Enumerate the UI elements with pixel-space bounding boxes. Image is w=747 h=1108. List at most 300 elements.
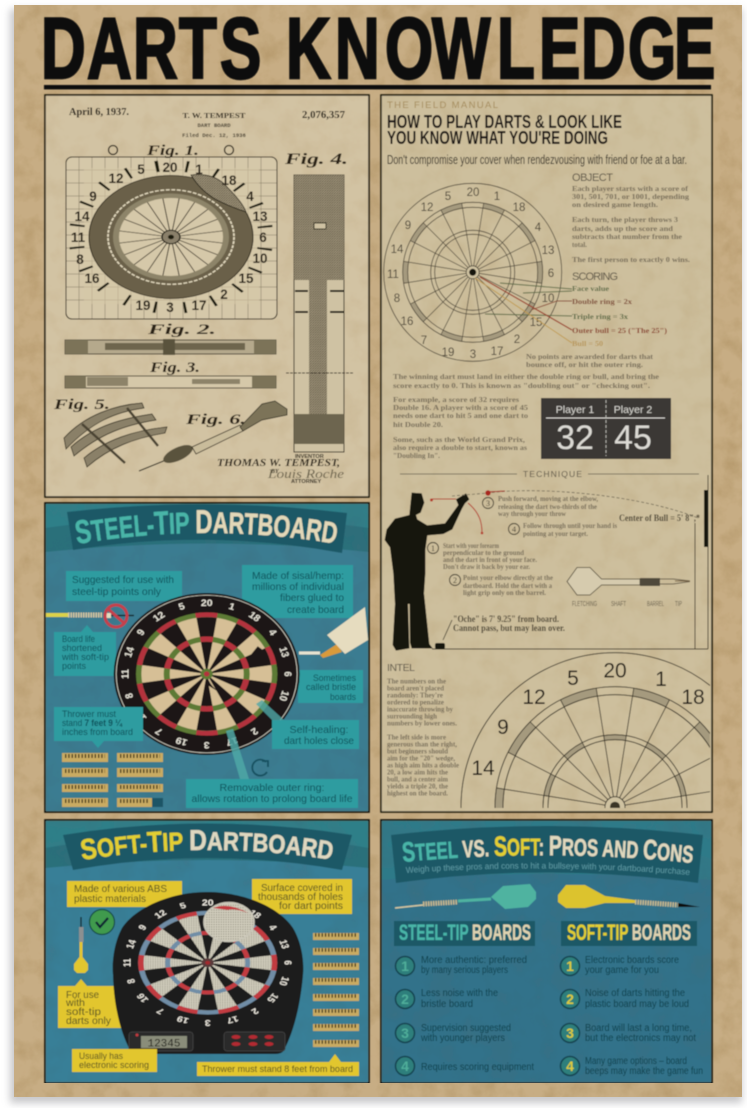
board numbers: 6 [548, 268, 554, 280]
chalkboard scores [541, 398, 671, 459]
patent header: T. W. TEMPEST [182, 112, 246, 120]
patent signature block: ATTORNEY [291, 479, 322, 485]
diagram: outline dartboard [382, 182, 563, 363]
scoring text: Bull = 50 [572, 339, 603, 348]
board numbers: 5 [137, 162, 145, 177]
callout: self-healing [256, 700, 359, 749]
callout: electronic scoring [72, 1049, 157, 1072]
technique steps: dartboard. Hold the dart with a [463, 581, 552, 590]
board numbers: 2 [248, 725, 260, 737]
chalkboard scores: 32 [556, 419, 594, 457]
board numbers: 5 [177, 601, 187, 613]
patent signature block: INVENTOR [295, 454, 324, 460]
object text: The first person to exactly 0 wins. [572, 255, 690, 264]
board numbers [122, 899, 294, 1027]
doubling text: Double 16. A player with a score of 45 [393, 403, 528, 412]
board numbers [120, 599, 293, 749]
icon: rotation arrow [252, 760, 268, 776]
callout: surface holes: thousands of holes [258, 892, 343, 903]
board numbers: 7 [421, 335, 427, 347]
intel text: highest on the board. [387, 788, 448, 798]
figure 1: patent dartboard [62, 143, 280, 319]
patent signature block: BY [270, 469, 280, 475]
callout: sisal: millions of individual [252, 582, 344, 593]
panel: steel vs soft pros and cons [381, 820, 712, 1083]
column: soft-tip boards: Many game options – board [585, 1056, 687, 1067]
board numbers: 7 [153, 725, 165, 736]
board numbers: 13 [542, 245, 554, 257]
board numbers: 11 [120, 669, 132, 679]
enlarged numbers: 1 [655, 668, 667, 691]
board numbers: 16 [133, 708, 150, 722]
figure 3: cross section bar: Fig. 3. [149, 360, 200, 376]
board numbers: 7 [155, 1006, 166, 1016]
intel text: surrounding high [387, 712, 437, 720]
column: soft-tip boards: Electronic boards score [585, 955, 679, 966]
board numbers: 14 [124, 938, 139, 950]
doubling text: also require a double to start, known as [393, 443, 527, 452]
column: steel-tip boards: bristle board [421, 999, 473, 1010]
callout: sisal: create board [287, 605, 344, 616]
board numbers: 10 [276, 689, 291, 703]
figure 6: patent dart [139, 401, 287, 471]
technique steps: way through your throw [498, 509, 567, 518]
oche note [435, 615, 565, 649]
board numbers: 20 [467, 187, 479, 199]
callout: surface holes [252, 879, 352, 914]
board numbers: 11 [387, 269, 399, 281]
board numbers: 4 [246, 189, 254, 204]
callout: soft-tip only [58, 979, 121, 1028]
callout: thrower distance: stand 7 feet 9 ¼ [62, 718, 123, 728]
patent header: April 6, 1937. [69, 107, 130, 118]
callout: ABS plastic [67, 881, 182, 907]
intel text: but beginners should [387, 746, 449, 756]
callout: removable outer ring: Removable outer ring: [220, 783, 324, 794]
column: soft-tip boards: 4 [566, 1058, 574, 1074]
patent header [69, 107, 345, 139]
board numbers [387, 187, 554, 361]
object text: total. [572, 240, 587, 249]
callout: electronic scoring: electronic scoring [79, 1060, 149, 1070]
score display [129, 1032, 193, 1051]
figure 5: wire segments [53, 397, 167, 467]
callout: electronic scoring: Usually has [79, 1051, 123, 1061]
callout: soft-tip only: For use [66, 990, 99, 1001]
board numbers: 9 [135, 627, 148, 638]
doubling text: "Doubling In". [393, 451, 440, 460]
intel text: The left side is more [387, 732, 447, 742]
oche note: "Oche" is 7' 9.25" from board. [453, 615, 559, 625]
callout: board life: points [62, 661, 86, 672]
pros and cons heading banner [391, 826, 703, 883]
patent signature block: Louis Roche [267, 466, 344, 481]
technique steps: releasing the dart two-thirds of the [498, 502, 598, 511]
icon: steel dart [395, 884, 536, 909]
icon: soft dart [558, 885, 700, 908]
enlarged numbers: 5 [567, 667, 579, 690]
technique steps: 3 [486, 499, 490, 508]
technique steps: Point your elbow directly at the [463, 573, 554, 582]
board numbers: 14 [391, 244, 404, 256]
dart diagram: SHAFT [611, 599, 626, 608]
object text: Each player starts with a score of [572, 184, 689, 193]
figure 2: cross section bar [65, 322, 276, 355]
technique steps: 2 [453, 576, 457, 585]
board numbers: 17 [491, 346, 503, 358]
board numbers: 13 [252, 209, 268, 224]
doubling text [393, 372, 660, 460]
doubling text: score exactly to 0. This is known as "doubling out" or "checking out". [393, 381, 650, 390]
icon: soft dart [74, 917, 88, 973]
column: steel-tip boards: Requires scoring equipment [421, 1062, 534, 1073]
panel: field manual [381, 95, 747, 963]
score display: 12345 [147, 1038, 181, 1050]
object text: Each turn, the player throws 3 [572, 215, 678, 224]
callout: removable outer ring [186, 729, 358, 808]
intel text: board aren't placed [387, 684, 445, 692]
callout: board life [54, 625, 116, 676]
panel: soft-tip dartboard [45, 820, 369, 1083]
figure 2: cross section bar: Fig. 2. [146, 322, 216, 338]
magnified mesh [204, 902, 254, 942]
dart diagram [567, 568, 690, 608]
enlarged numbers: 20 [603, 660, 627, 682]
callout: bristle boards: boards [330, 692, 356, 703]
patent header: 2,076,357 [302, 110, 345, 121]
object text: subtracts that number from the [572, 232, 683, 241]
diagram: enlarged dartboard [460, 652, 711, 808]
board numbers: 18 [247, 908, 263, 920]
board numbers: 5 [445, 191, 451, 203]
scoring leader lines [475, 277, 572, 343]
icon: foot rulers [62, 753, 163, 807]
callout: thrower distance: inches from board [62, 727, 133, 737]
intel text: bull, and a center aim [387, 774, 449, 784]
board numbers: 3 [205, 1018, 211, 1027]
technique steps: 4 [512, 525, 516, 534]
scoring text: Triple ring = 3x [572, 312, 628, 321]
enlarged numbers: 18 [681, 686, 705, 709]
column: soft-tip boards: 3 [566, 1025, 574, 1041]
callout: self-healing: dart holes close [284, 736, 354, 747]
column: soft-tip boards: beeps may make the game fun [585, 1066, 703, 1077]
figure 4: vertical section: Fig. 4. [284, 151, 348, 168]
callout: sisal [242, 565, 353, 618]
icon: prohibited soft dart [46, 605, 134, 627]
callout: board life: shortened [62, 643, 102, 654]
callout: ABS plastic: plastic materials [74, 894, 146, 905]
board numbers: 20 [202, 899, 214, 907]
callout: soft-tip only: with [65, 998, 85, 1009]
board numbers: 8 [123, 691, 136, 700]
patent header: Filed Dec. 12, 1936 [182, 132, 247, 139]
board numbers: 18 [221, 173, 237, 188]
patent signature block [217, 454, 344, 485]
column: steel-tip boards: 2 [401, 991, 409, 1007]
board numbers: 13 [276, 646, 291, 659]
object text [572, 172, 690, 264]
technique heading: TECHNIQUE [523, 469, 582, 479]
scoring text: No points are awarded for darts that [526, 352, 654, 361]
board numbers: 20 [162, 160, 178, 175]
callout: board life: with soft-tip [61, 652, 109, 663]
column: steel-tip boards: with younger players [420, 1033, 505, 1044]
board numbers: 4 [535, 222, 542, 234]
intel text: INTEL [387, 662, 415, 674]
patent signature block: THOMAS W. TEMPEST, [217, 458, 340, 469]
doubling text: hit Double 20. [393, 420, 443, 429]
dart diagram: TIP [675, 599, 682, 608]
board numbers: 9 [136, 923, 149, 932]
board numbers: 14 [74, 209, 90, 224]
board numbers: 11 [122, 959, 133, 967]
board numbers: 2 [249, 1006, 261, 1016]
scoring text: Face value [572, 284, 610, 293]
board numbers: 4 [266, 923, 280, 932]
callout: bristle boards [298, 670, 363, 703]
column: soft-tip boards: but the electronics may not [585, 1033, 696, 1044]
technique steps: perpendicular to the ground [443, 548, 525, 557]
column: soft-tip boards: plastic board may be loud [585, 999, 689, 1010]
panel: steel-tip dartboard [45, 503, 369, 812]
board numbers: 15 [238, 271, 254, 286]
board numbers: 9 [405, 220, 411, 232]
technique steps: Follow through until your hand is [523, 521, 617, 530]
intel text: randomly: They're [387, 690, 444, 700]
column: soft-tip boards: Noise of darts hitting the [585, 988, 685, 999]
board numbers [71, 160, 268, 315]
throw arcs [430, 490, 698, 534]
icon: foot rulers [313, 933, 359, 1047]
board numbers: 6 [259, 230, 267, 245]
intel text: 20, a low aim hits the [387, 768, 449, 776]
intel text [387, 662, 460, 798]
dart diagram: FLETCHING [572, 599, 597, 608]
figure 6: patent dart: Fig. 6. [185, 412, 246, 428]
patent header: DART BOARD [197, 122, 231, 129]
callout: thrower distance [54, 707, 143, 748]
board numbers: 17 [191, 298, 207, 313]
callout: bristle boards: Sometimes [313, 673, 356, 684]
column: steel-tip boards: by many serious players [421, 965, 508, 976]
column: soft-tip boards [560, 920, 703, 1077]
silhouette of thrower [385, 493, 469, 651]
callout: steel-tip points: steel-tip points only [72, 587, 162, 598]
board numbers: 5 [178, 901, 187, 910]
board numbers: 16 [401, 316, 413, 328]
board numbers: 1 [195, 162, 203, 177]
board numbers: 6 [282, 671, 293, 677]
chalkboard scores: 45 [614, 419, 652, 457]
enlarged numbers: 9 [497, 716, 509, 739]
doubling text: For example, a score of 32 requires [393, 395, 519, 404]
board numbers: 10 [277, 976, 291, 987]
board numbers: 12 [151, 610, 168, 624]
technique steps: Don't draw it back by your ear. [443, 562, 530, 571]
board numbers: 18 [513, 202, 525, 214]
callout: board life: Board life [62, 634, 95, 645]
technique steps: and the dart in front of your face. [443, 555, 537, 564]
board numbers: 2 [220, 287, 228, 302]
board numbers: 4 [266, 628, 279, 638]
callout: surface holes: Surface covered in [261, 883, 343, 894]
callout: steel-tip points [66, 571, 182, 601]
callout: soft-tip only: darts only [66, 1016, 111, 1027]
doubling text: Some, such as the World Grand Prix, [393, 435, 525, 444]
dart diagram: BARREL [647, 599, 664, 608]
intel text: yields a triple 20, the [387, 782, 449, 790]
icon: glue bottle [299, 607, 368, 658]
technique steps: Start with your forearm [443, 541, 500, 550]
board numbers: 8 [76, 252, 84, 267]
intel text: generous than the right, [387, 740, 457, 748]
board numbers: 17 [225, 1014, 240, 1025]
board numbers: 8 [125, 978, 138, 985]
board numbers: 12 [108, 171, 124, 186]
board numbers: 19 [176, 1014, 190, 1025]
board numbers: 3 [203, 739, 210, 749]
intel text: aim for the "20" wedge, [387, 754, 455, 762]
column: steel-tip boards: More authentic: preferred [421, 955, 527, 966]
column: soft-tip boards: 2 [566, 991, 574, 1007]
object text: darts, adds up the score and [572, 224, 674, 233]
intel text: ordered to penalize [387, 698, 445, 706]
callout: ABS plastic: Made of various ABS [74, 884, 167, 895]
column: soft-tip boards: your game for you [585, 965, 659, 976]
board numbers: 15 [265, 992, 281, 1004]
scoring text [526, 271, 668, 369]
intel text: as high aim hits a double [387, 760, 460, 770]
board numbers: 3 [470, 349, 476, 361]
callout: surface holes: for dart points [279, 901, 343, 912]
board numbers: 19 [174, 734, 189, 747]
column: steel-tip boards: 1 [401, 958, 409, 974]
technique steps [428, 494, 617, 597]
callout: steel-tip points: Suggested for use with [72, 575, 174, 586]
column: soft-tip boards: Board will last a long time, [585, 1023, 692, 1034]
doubling text: needs one dart to hit 5 and one dart to [393, 411, 528, 420]
intel text: numbers by lower ones. [387, 718, 457, 728]
callout: self-healing: Self-healing: [290, 725, 348, 736]
scoring text: Double ring = 2x [572, 297, 632, 306]
enlarged numbers: 14 [471, 757, 495, 780]
technique steps: pointing at your target. [523, 529, 588, 538]
board numbers: 15 [530, 317, 542, 329]
callout: soft-tip only: soft-tip [66, 1007, 102, 1018]
figure 1: patent dartboard: Fig. 1. [146, 143, 199, 159]
board numbers: 2 [514, 334, 520, 346]
chalkboard scores: Player 2 [614, 404, 652, 416]
intel text: The numbers on the [387, 676, 447, 686]
callout: sisal: fibers glued to [280, 593, 344, 604]
figure 3: cross section bar [65, 360, 276, 388]
callout: 8 feet [197, 1054, 359, 1076]
board numbers: 19 [442, 347, 454, 359]
board numbers: 20 [201, 599, 213, 609]
field manual heading: THE FIELD MANUAL [387, 100, 498, 111]
board numbers: 16 [135, 992, 151, 1004]
board numbers: 18 [246, 610, 263, 625]
board numbers: 1 [494, 191, 500, 203]
column: steel-tip boards: 3 [401, 1025, 409, 1041]
pros and cons heading banner: Weigh up these pros and cons to hit a bullseye with your dartboard purchase [405, 862, 690, 876]
object text: on desired game length. [572, 200, 658, 209]
column: steel-tip boards: STEEL-TIP BOARDS [399, 920, 531, 945]
button panel [224, 1032, 285, 1051]
board numbers: 17 [224, 734, 239, 747]
callout: bristle boards: called bristle [306, 682, 356, 693]
board numbers: 13 [277, 939, 291, 950]
board numbers: 10 [252, 251, 268, 266]
doubling text: The winning dart must land in either the double ring or bull, and bring the [393, 372, 660, 381]
scoring text: SCORING [572, 271, 618, 283]
technique steps: light grip only on the barrel. [463, 588, 546, 597]
figure 5: wire segments: Fig. 5. [53, 397, 110, 413]
board numbers: 16 [84, 271, 100, 286]
board numbers: 14 [123, 645, 138, 659]
intel text: inaccurate throwing by [387, 704, 453, 714]
icon: check mark badge [90, 910, 114, 934]
center of bull marker [432, 475, 708, 649]
board numbers: 8 [394, 293, 400, 305]
steel-tip dartboard graphic [114, 593, 300, 755]
enlarged numbers: 12 [522, 686, 546, 709]
field manual heading: YOU KNOW WHAT YOU'RE DOING [387, 127, 608, 148]
board numbers: 12 [421, 202, 433, 214]
board numbers: 12 [152, 908, 168, 920]
soft heading banner: SOFT-TIP DARTBOARD [80, 829, 334, 860]
callout: thrower distance: Thrower must [62, 709, 116, 719]
oche note: Cannot pass, but may lean over. [453, 624, 565, 634]
field manual heading: HOW TO PLAY DARTS & LOOK LIKE [387, 111, 622, 132]
field manual heading [387, 100, 687, 167]
panel borders [45, 503, 712, 1083]
center of bull marker: Center of Bull = 5' 8",* [619, 513, 700, 523]
title: DARTS KNOWLEDGE [41, 0, 715, 96]
soft-tip dartboard graphic [113, 892, 303, 1054]
board numbers: 11 [71, 230, 86, 245]
column: soft-tip boards: 1 [566, 958, 574, 974]
callout: sisal: Made of sisal/hemp: [252, 571, 344, 582]
object text: OBJECT [572, 172, 613, 184]
board numbers: 9 [89, 189, 97, 204]
board numbers: 19 [135, 298, 151, 313]
callout: removable outer ring: allows rotation to prolong board life [192, 794, 353, 805]
figure 4: vertical section [284, 151, 354, 452]
board numbers: 1 [227, 602, 237, 613]
scoring text: bounce off, or hit the outer ring. [526, 360, 643, 369]
steel heading banner: STEEL-TIP DARTBOARD [74, 509, 338, 544]
column: steel-tip boards [394, 920, 535, 1076]
board numbers: 10 [542, 293, 554, 305]
technique steps: Push forward, moving at the elbow, [498, 494, 598, 503]
enlarged numbers [471, 660, 705, 780]
chalkboard scores: Player 1 [556, 404, 594, 416]
column: steel-tip boards: Less noise with the [421, 988, 498, 999]
panel: patent drawing [45, 95, 369, 497]
board numbers: 3 [166, 300, 174, 315]
scoring text: Outer bull = 25 ("The 25") [572, 326, 668, 335]
board numbers: 6 [282, 961, 294, 965]
column: steel-tip boards: Supervision suggested [421, 1023, 511, 1034]
column: soft-tip boards: SOFT-TIP BOARDS [567, 920, 691, 945]
column: steel-tip boards: 4 [401, 1058, 409, 1074]
object text: 301, 501, 701, or 1001, depending [572, 192, 689, 201]
technique steps: 1 [431, 544, 435, 553]
pros and cons heading banner: STEEL VS. SOFT: PROS AND CONS [402, 834, 694, 864]
callout: 8 feet: Thrower must stand 8 feet from board [202, 1064, 353, 1075]
